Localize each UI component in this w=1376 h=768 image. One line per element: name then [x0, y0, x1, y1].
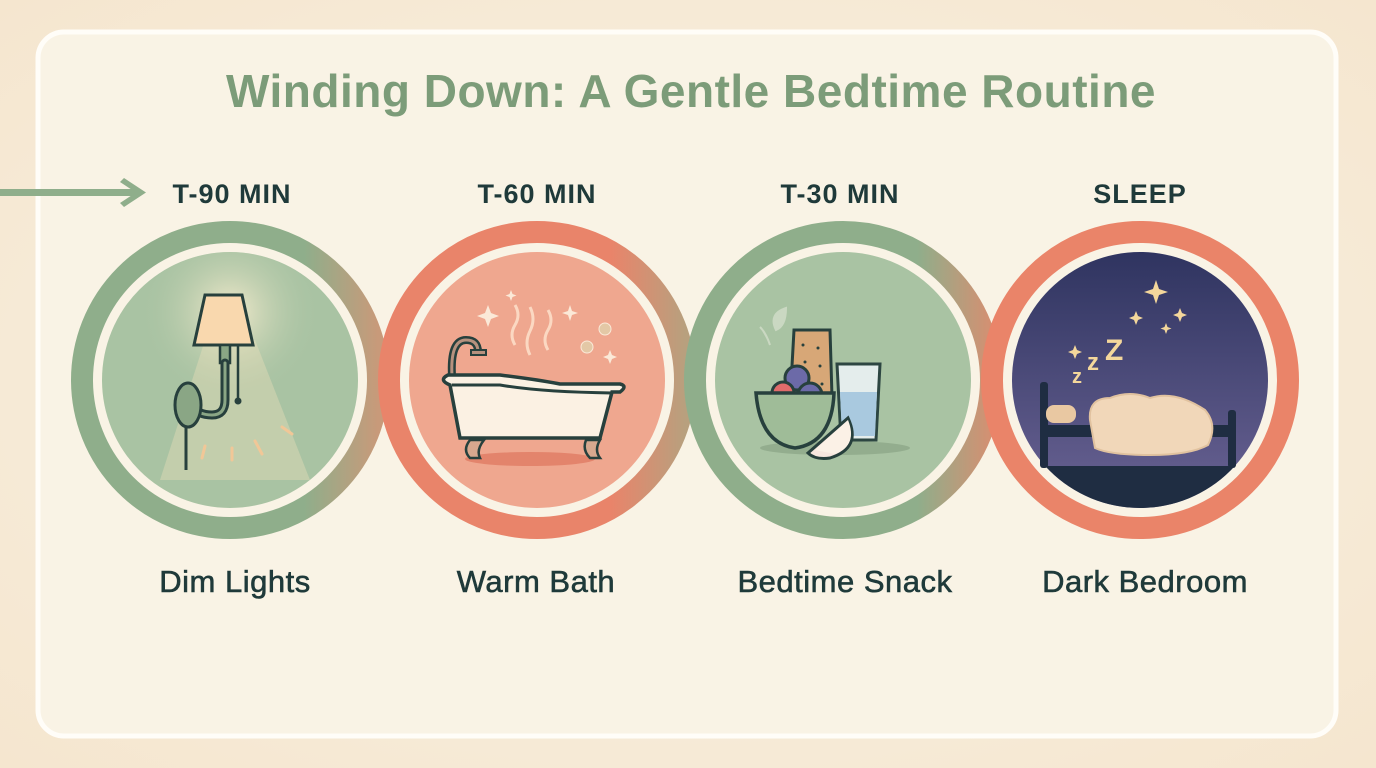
step 2: warm bath	[389, 232, 685, 528]
arrow	[0, 178, 146, 207]
timing labels: T-60 MIN	[477, 179, 597, 209]
timing labels: SLEEP	[1093, 179, 1187, 209]
step names: Dark Bedroom	[1042, 564, 1248, 599]
step names: Bedtime Snack	[738, 564, 952, 599]
step 4: dark bedroom: z	[1072, 366, 1082, 388]
timing labels: T-90 MIN	[172, 179, 292, 209]
title: Winding Down: A Gentle Bedtime Routine	[226, 65, 1156, 117]
step 4: dark bedroom: Z	[1105, 334, 1123, 367]
step 1: dim lights	[82, 232, 378, 528]
step 4: dark bedroom	[992, 232, 1288, 528]
step names	[159, 564, 1248, 599]
step names: Dim Lights	[159, 564, 311, 599]
step names: Warm Bath	[457, 564, 615, 599]
step 3: bedtime snack	[695, 232, 991, 528]
step 4: dark bedroom: z	[1087, 349, 1099, 376]
timing labels: T-30 MIN	[780, 179, 900, 209]
timing labels	[172, 179, 1187, 209]
